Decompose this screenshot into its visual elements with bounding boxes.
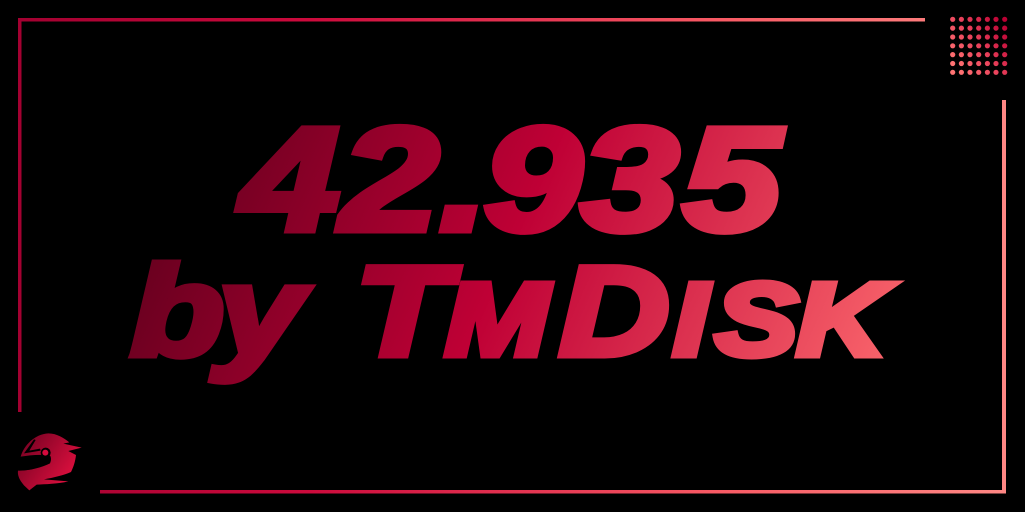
icon: racing helmet [18, 433, 82, 490]
by TmDisk line: ISK [673, 263, 895, 378]
by TmDisk line: T [355, 240, 459, 382]
number line: 42.935 [238, 98, 784, 262]
by TmDisk line: M [445, 263, 551, 378]
headline [131, 98, 895, 382]
by TmDisk line: D [559, 240, 669, 382]
dot grid [950, 17, 1007, 75]
visor detail [41, 448, 51, 458]
by TmDisk line: by [131, 240, 310, 382]
